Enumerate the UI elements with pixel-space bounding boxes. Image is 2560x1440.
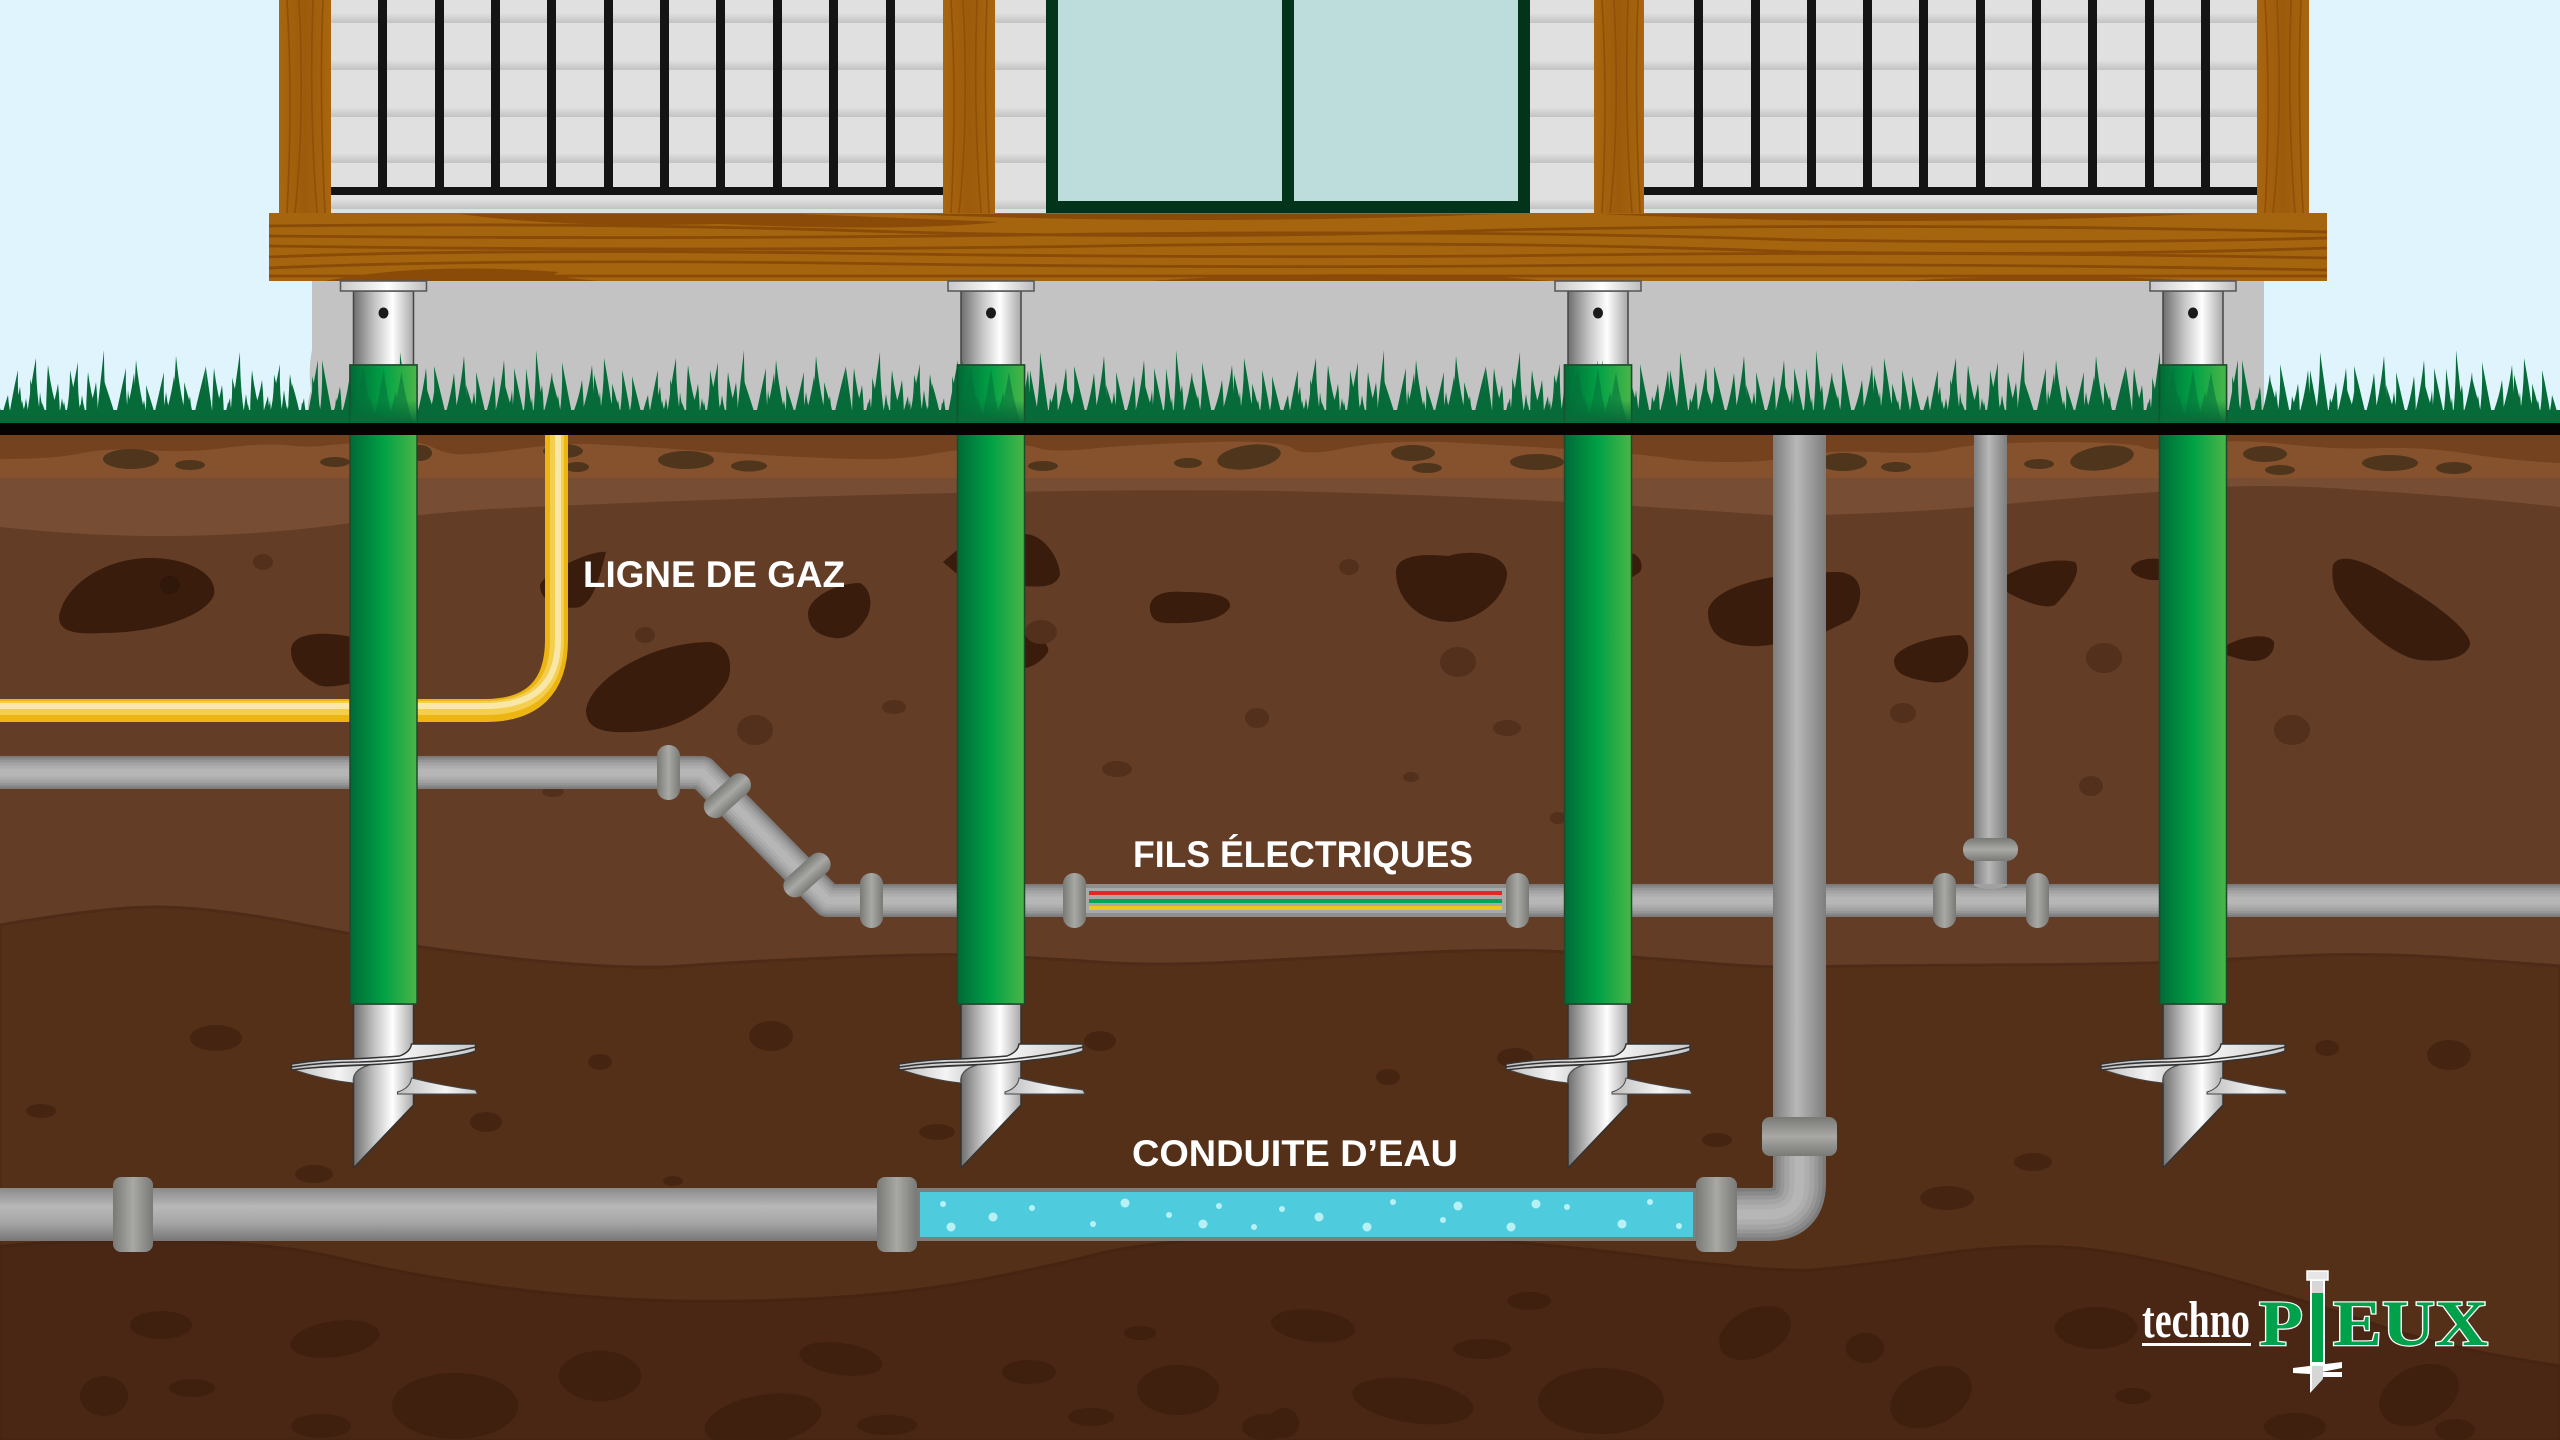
water bubbles [940, 1198, 1682, 1232]
pile 1 [292, 281, 478, 1168]
pile 4 [2101, 281, 2287, 1168]
clay band [0, 478, 2560, 558]
elbow and riser [1730, 1140, 1800, 1214]
right railing [1644, 0, 2257, 195]
water section [917, 1188, 1696, 1241]
logo underline [2142, 1343, 2251, 1346]
pile 1 top [350, 365, 417, 424]
background sky [0, 0, 2560, 440]
left railing [331, 0, 943, 195]
label: electrical wires: FILS ÉLECTRIQUES [1133, 834, 1473, 875]
pile tops among grass [350, 365, 2226, 424]
patio door window [1046, 0, 1530, 213]
pile 3 top [1564, 365, 1632, 424]
left pipe [0, 1188, 880, 1241]
pile 2 top [958, 365, 1024, 424]
soil layers [0, 435, 2560, 1440]
main soil layer [0, 486, 2560, 980]
logo wordmark techno: techno [2142, 1292, 2250, 1349]
logo pile icon [2293, 1271, 2342, 1393]
riser pipe [1773, 435, 1826, 1135]
label: water main: CONDUITE D’EAU [1132, 1133, 1458, 1174]
pile 4 top [2160, 365, 2226, 424]
bottom layer stones [80, 1292, 2475, 1440]
pile 2 [899, 281, 1085, 1168]
lower layer stones [26, 1021, 2471, 1210]
bottom soil layer [0, 1233, 2560, 1440]
conduit couplers [657, 745, 2049, 928]
logo letters EUX: EUX [2333, 1288, 2488, 1360]
deck beam [269, 213, 2327, 281]
conduit pipe run [0, 772, 2560, 900]
screw piles [292, 281, 2287, 1168]
dark topsoil wave [0, 435, 2560, 463]
large dark stones [59, 534, 2470, 732]
electrical conduit [0, 745, 2560, 928]
house foundation wall [307, 281, 2264, 426]
topsoil [0, 435, 2560, 479]
house: siding, railing, window and deck [269, 0, 2327, 281]
rocks [26, 441, 2475, 1440]
exposed electric wires [1086, 884, 1506, 917]
siding [331, 0, 2259, 213]
wooden posts [279, 0, 2309, 213]
pile 3 [1506, 281, 1692, 1168]
gas line [0, 430, 558, 710]
small mid stones [160, 554, 2310, 824]
topsoil stones [103, 441, 2472, 475]
pipe couplers [113, 1117, 1837, 1252]
water main [0, 435, 1837, 1252]
label: gas line: LIGNE DE GAZ [583, 554, 845, 595]
branch drain pipe [1963, 435, 2018, 889]
grass [0, 350, 2560, 424]
lower soil layer [0, 907, 2560, 1440]
logo letter P: P [2259, 1288, 2303, 1360]
ground line [0, 423, 2560, 435]
logo: technoPIEUX [2142, 1271, 2488, 1393]
